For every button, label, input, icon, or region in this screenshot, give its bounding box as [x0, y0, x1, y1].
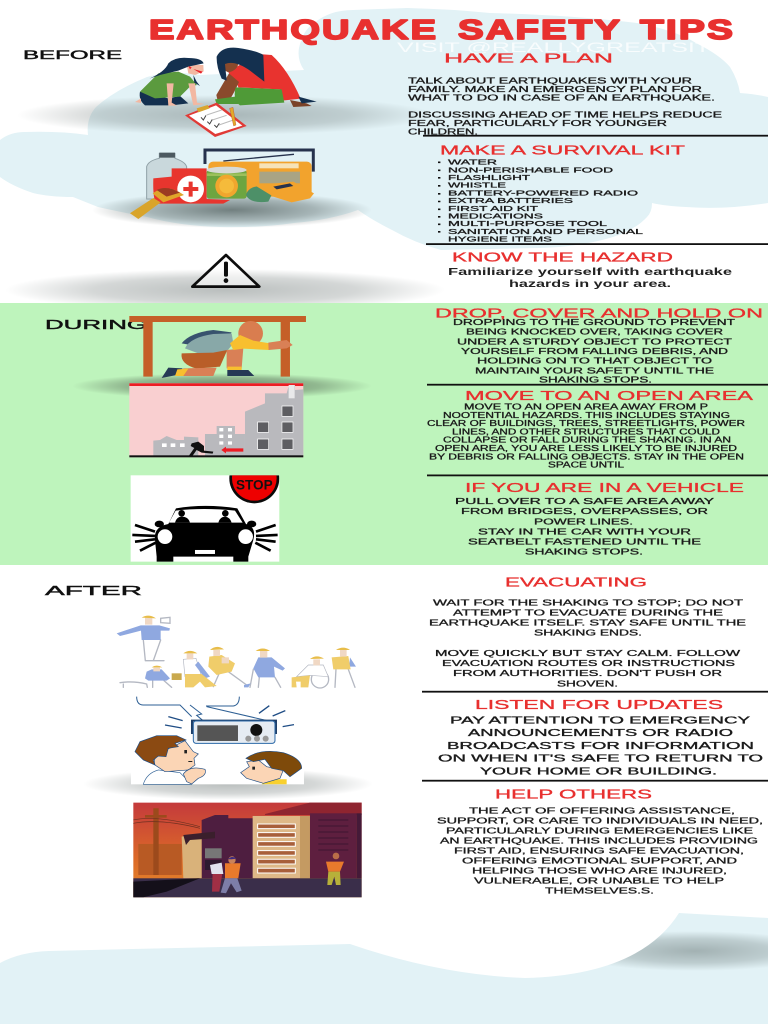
- text block: drop details: HOLDING ON TO THAT OBJECT TO: [477, 356, 713, 366]
- section: evacuating: [429, 576, 747, 689]
- section label: during: DURING: [45, 317, 147, 332]
- text block: plan details: CHILDREN.: [408, 128, 478, 136]
- text block: open area details: LINES, AND OTHER STRUCTURES THAT COULD: [452, 427, 720, 436]
- list: kit items: WHISTLE: [448, 181, 506, 190]
- list: kit items: EXTRA BATTERIES: [448, 196, 573, 205]
- section label: before: BEFORE: [23, 48, 122, 62]
- text block: updates details: PAY ATTENTION TO EMERGENCY: [450, 715, 750, 726]
- watermark text: VISIT @REALLYGREATSITE: [397, 39, 727, 55]
- heading: know the hazard: KNOW THE HAZARD: [452, 250, 673, 264]
- title: TIPS: [640, 14, 735, 45]
- list: kit items: FIRST AID KIT: [448, 204, 539, 213]
- list: kit items: NON-PERISHABLE FOOD: [448, 165, 614, 174]
- text block: vehicle details: SEATBELT FASTENED UNTIL THE: [468, 536, 702, 546]
- shadow: bottom right: [612, 932, 768, 970]
- text block: vehicle details: POWER LINES.: [534, 516, 633, 526]
- illustration: evacuating people: [117, 616, 356, 688]
- heading: have a plan: HAVE A PLAN: [444, 52, 613, 66]
- text block: hazard details: Familiarize yourself with earthquake: [448, 266, 732, 278]
- illustration: family making a plan: [135, 48, 317, 137]
- text block: evacuating details: MOVE QUICKLY BUT STAY CALM. FOLLOW: [435, 648, 740, 658]
- text block: help details: THE ACT OF OFFERING ASSISTANCE,: [469, 805, 735, 815]
- text block: hazard details: [448, 266, 732, 290]
- heading: evacuating: EVACUATING: [505, 576, 647, 590]
- background cloud: bottom: [0, 913, 768, 1024]
- text block: open area details: CLEAR OF BUILDINGS, TREES, STREETLIGHTS, POWER: [427, 419, 745, 428]
- text block: evacuating details: ATTEMPT TO EVACUATE DURING THE: [453, 608, 724, 618]
- text block: help details: SUPPORT, OR CARE TO INDIVIDUALS IN NEED,: [437, 815, 763, 825]
- text block: evacuating details: EARTHQUAKE ITSELF. STAY SAFE UNTIL THE: [429, 618, 747, 628]
- text block: updates details: ANNOUNCEMENTS OR RADIO: [468, 728, 733, 739]
- list: kit items: [438, 158, 643, 244]
- text block: updates details: BROADCASTS FOR INFORMATION: [447, 741, 754, 752]
- text block: vehicle details: PULL OVER TO A SAFE AREA AWAY: [455, 496, 715, 506]
- section: have a plan: [408, 52, 722, 136]
- shadow: hazard icon: [5, 269, 445, 311]
- text block: open area details: OPEN AREA, YOU ARE LESS LIKELY TO BE INJURED: [435, 444, 737, 453]
- text block: updates details: [438, 715, 763, 778]
- text block: drop details: YOURSELF FROM FALLING DEBRIS, AND: [461, 346, 728, 356]
- text block: drop details: DROPPING TO THE GROUND TO PREVENT: [453, 317, 735, 327]
- text block: help details: FIRST AID, ENSURING SAFE EVACUATION,: [454, 845, 744, 855]
- text block: open area details: BY DEBRIS OR FALLING OBJECTS. STAY IN THE OPEN: [429, 452, 744, 461]
- text block: vehicle details: STAY IN THE CAR WITH YOUR: [478, 526, 691, 536]
- text block: updates details: YOUR HOME OR BUILDING.: [480, 767, 717, 778]
- text block: vehicle details: [455, 496, 715, 556]
- section: help others: [437, 787, 763, 895]
- text block: plan details: [408, 76, 722, 136]
- title: [149, 14, 735, 45]
- illustration: damaged city with helpers: [133, 803, 362, 897]
- shadow: drop cover illustration: [72, 373, 372, 399]
- text block: help details: PARTICULARLY DURING EMERGENCIES LIKE: [446, 825, 754, 835]
- heading: make a survival kit: MAKE A SURVIVAL KIT: [440, 144, 686, 158]
- text block: help details: OFFERING EMOTIONAL SUPPORT, AND: [462, 855, 737, 865]
- background cloud: top: [0, 8, 768, 250]
- section label: after: AFTER: [45, 583, 142, 598]
- text block: plan details: FAMILY. MAKE AN EMERGENCY PLAN FOR: [408, 85, 702, 94]
- text block: evacuating details: WAIT FOR THE SHAKING TO STOP; DO NOT: [433, 598, 743, 608]
- list: kit items: HYGIENE ITEMS: [448, 235, 552, 244]
- text block: help details: THEMSELVES.S.: [545, 885, 654, 895]
- text block: evacuating details: SHAKING ENDS.: [534, 628, 642, 638]
- text block: open area details: [427, 402, 745, 470]
- text block: open area details: SPACE UNTIL: [548, 461, 625, 470]
- shadow: survival kit illustration: [92, 192, 372, 228]
- title: SAFETY: [458, 14, 622, 45]
- text block: help details: [437, 805, 763, 895]
- section: make a survival kit: [438, 144, 686, 244]
- list: kit items: MEDICATIONS: [448, 212, 543, 220]
- text block: drop details: BEING KNOCKED OVER, TAKING COVER: [466, 327, 723, 337]
- text block: updates details: ON WHEN IT'S SAFE TO RETURN TO: [438, 754, 763, 765]
- text block: vehicle details: SHAKING STOPS.: [525, 546, 643, 556]
- section: if you are in a vehicle: [455, 481, 744, 556]
- text block: evacuating details: SHOVEN.: [557, 679, 618, 689]
- heading: help others: HELP OTHERS: [495, 787, 652, 801]
- list: kit items: WATER: [448, 158, 498, 166]
- section: drop cover and hold on: [435, 307, 763, 385]
- illustration: car and stop sign: STOP: [236, 476, 273, 492]
- illustration: running to open area: [129, 383, 303, 457]
- shadow: plan illustration: [17, 95, 433, 135]
- section: know the hazard: [448, 250, 732, 290]
- text block: plan details: TALK ABOUT EARTHQUAKES WITH YOUR: [408, 76, 692, 86]
- text block: drop details: MAINTAIN YOUR SAFETY UNTIL THE: [475, 365, 715, 375]
- text block: help details: VULNERABLE, OR UNABLE TO HELP: [474, 875, 725, 885]
- text block: open area details: MOVE TO AN OPEN AREA AWAY FROM P: [464, 402, 708, 411]
- heading: drop cover and hold on: DROP, COVER AND HOLD ON: [435, 307, 763, 321]
- text block: vehicle details: FROM BRIDGES, OVERPASSES, OR: [461, 506, 708, 516]
- text block: drop details: SHAKING STOPS.: [539, 375, 652, 385]
- panel: during background: [0, 303, 768, 565]
- section: listen for updates: [438, 698, 763, 778]
- heading: listen for updates: LISTEN FOR UPDATES: [475, 698, 723, 712]
- list: kit items: BATTERY-POWERED RADIO: [448, 188, 638, 198]
- list: kit items: SANITATION AND PERSONAL: [448, 227, 643, 236]
- text block: drop details: UNDER A STURDY OBJECT TO PROTECT: [457, 336, 732, 346]
- text block: help details: AN EARTHQUAKE. THIS INCLUDES PROVIDING: [440, 835, 758, 845]
- text block: open area details: NOOTENTIAL HAZARDS. THIS INCLUDES STAYING: [443, 411, 730, 420]
- text block: drop details: [453, 317, 735, 385]
- list: kit items: MULTI-PURPOSE TOOL: [448, 219, 607, 228]
- illustration: car and stop sign: [130, 475, 280, 562]
- text block: plan details: WHAT TO DO IN CASE OF AN EARTHQUAKE.: [408, 94, 715, 102]
- text block: evacuating details: [429, 598, 747, 689]
- text block: evacuating details: EVACUATION ROUTES OR INSTRUCTIONS: [442, 658, 736, 668]
- illustration: survival kit: [130, 150, 314, 219]
- icon: hazard warning triangle: [192, 255, 259, 287]
- heading: move to an open area: MOVE TO AN OPEN AREA: [465, 389, 754, 403]
- title: EARTHQUAKE: [149, 14, 438, 45]
- text block: hazard details: hazards in your area.: [509, 278, 671, 290]
- illustration: radio and two boys: [131, 697, 304, 784]
- text block: plan details: FEAR, PARTICULARLY FOR YOUNGER: [408, 119, 667, 128]
- list: kit items: FLASHLIGHT: [448, 173, 531, 182]
- text block: open area details: COLLAPSE OR FALL DURING THE SHAKING. IN AN: [443, 436, 731, 445]
- shadow: radio illustration: [83, 768, 373, 800]
- text block: evacuating details: FROM AUTHORITIES. DON'T PUSH OR: [453, 668, 722, 678]
- illustration: person under table: [129, 316, 306, 378]
- text block: plan details: DISCUSSING AHEAD OF TIME HELPS REDUCE: [408, 110, 722, 120]
- section: move to an open area: [427, 389, 754, 470]
- heading: if you are in a vehicle: IF YOU ARE IN A VEHICLE: [465, 481, 744, 495]
- text block: help details: HELPING THOSE WHO ARE INJURED,: [472, 865, 727, 875]
